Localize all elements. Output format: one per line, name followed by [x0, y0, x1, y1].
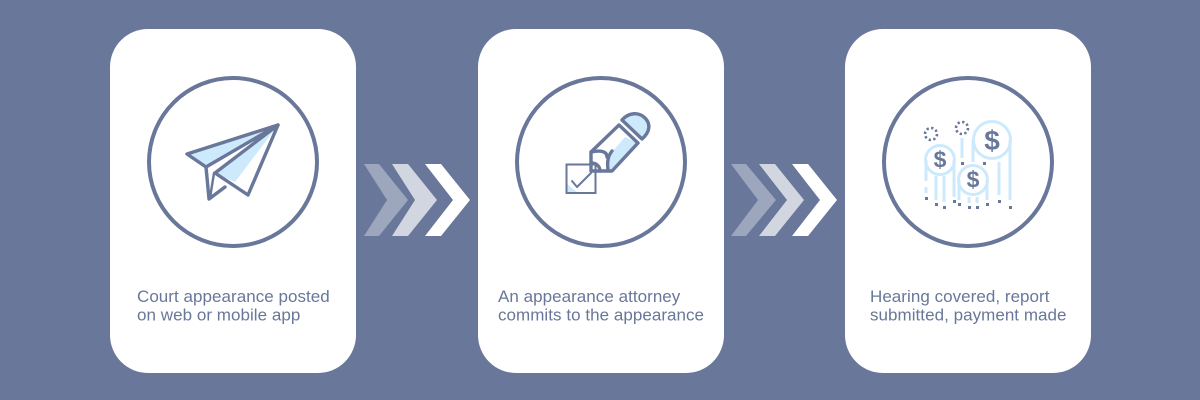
panel: step 2 commitment	[478, 29, 724, 373]
icon ring: step 3	[884, 78, 1052, 246]
text: step 3 caption: submitted, payment made	[870, 306, 1067, 324]
icon: paper plane	[187, 125, 278, 199]
icon: falling dollar coins: $	[984, 125, 1000, 156]
arrows: chevrons between step 2 and step 3	[731, 164, 837, 236]
icon: pen and checkbox	[566, 114, 649, 193]
text: step 3 caption: Hearing covered, report	[870, 287, 1050, 306]
panel: step 3 completion	[845, 29, 1091, 373]
card: step 1 background	[110, 29, 356, 373]
icon ring: step 2	[517, 78, 685, 246]
card: step 2 background	[478, 29, 724, 373]
icon: falling dollar coins: $	[967, 166, 980, 192]
icon: falling dollar coins: $	[934, 146, 947, 172]
card: step 3 background	[845, 29, 1091, 373]
icon ring: step 1	[149, 78, 317, 246]
text: step 2 caption: An appearance attorney	[498, 287, 681, 306]
panel: step 1 posting	[110, 29, 356, 373]
text: step 1 caption: on web or mobile app	[137, 306, 300, 324]
text: step 2 caption: commits to the appearance	[498, 306, 704, 324]
icon: falling dollar coins	[925, 122, 1012, 209]
text: step 1 caption: Court appearance posted	[137, 287, 330, 306]
arrows: chevrons between step 1 and step 2	[364, 164, 470, 236]
